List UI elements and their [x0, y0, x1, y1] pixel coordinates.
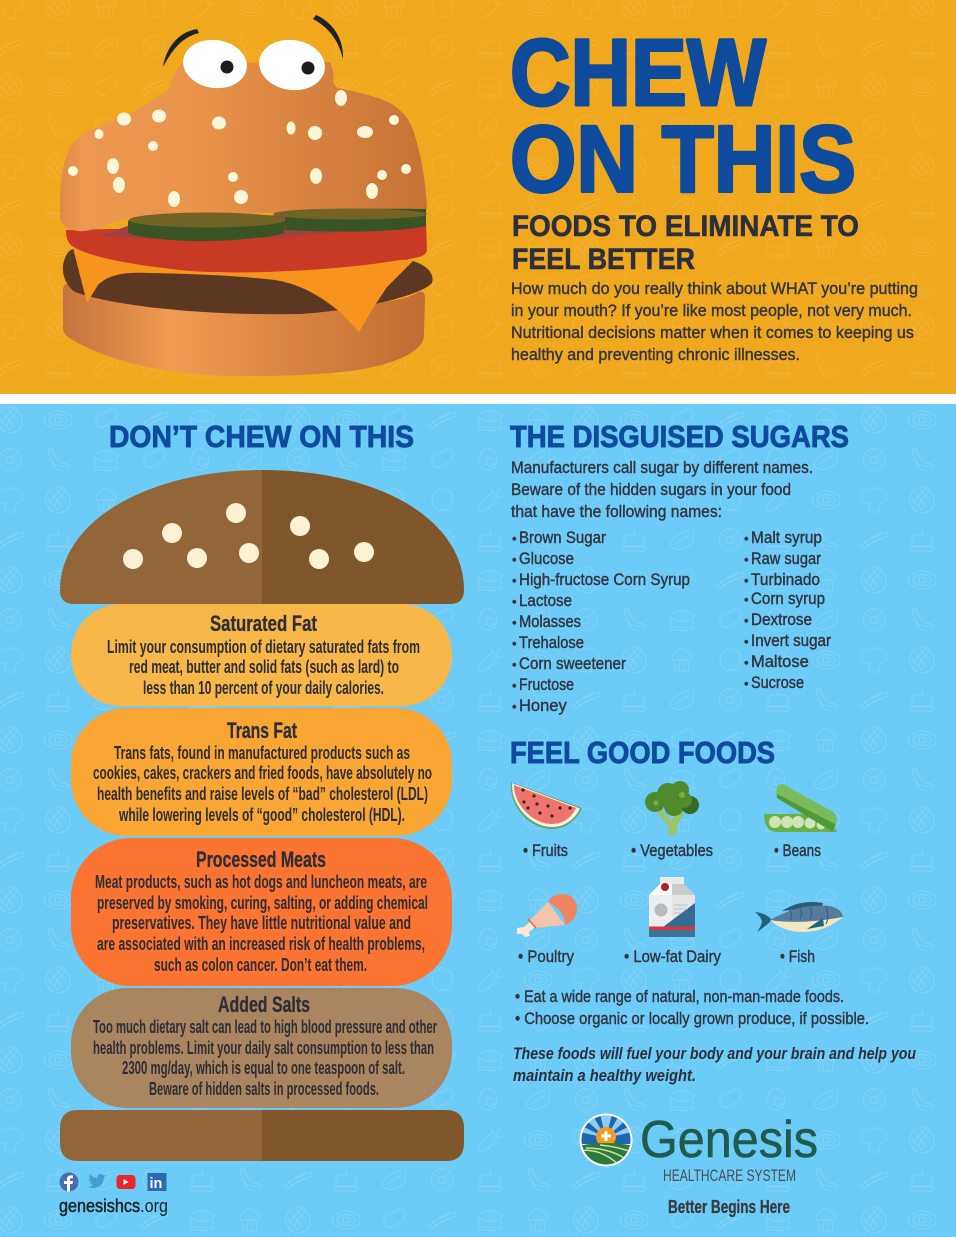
panel: processed meats: Processed Meats	[196, 847, 326, 872]
panel: added salts: Beware of hidden salts in processed foods.	[149, 1079, 379, 1099]
food advice bullets: • Choose organic or locally grown produce, if possible.	[515, 1010, 869, 1028]
icon: poultry leg	[517, 894, 577, 937]
sugar list: left column: Corn sweetener	[519, 655, 626, 673]
label: fish: • Fish	[780, 948, 815, 966]
icon: beans	[764, 784, 837, 832]
sugar list: right column: Turbinado	[751, 571, 820, 589]
sugar list: left column: •	[512, 594, 517, 609]
sugar list: left column: •	[512, 636, 517, 651]
sugars intro: Manufacturers call sugar by different names.	[511, 459, 813, 477]
sugar list: left column: Trehalose	[519, 634, 584, 652]
panel: added salts: Added Salts	[218, 992, 310, 1017]
sugar list: right column: •	[744, 655, 749, 670]
panel: added salts: 2300 mg/day, which is equal to one teaspoon of salt.	[122, 1058, 405, 1078]
intro paragraph: Nutritional decisions matter when it comes to keeping us	[511, 324, 914, 342]
logo: genesis healthcare system: HEALTHCARE SYSTEM	[663, 1166, 796, 1185]
sugar list: right column: Corn syrup	[751, 590, 825, 608]
label: fruits: • Fruits	[523, 842, 568, 860]
sugar list: right column: Dextrose	[751, 611, 812, 629]
subtitle: FEEL BETTER	[512, 243, 695, 276]
tagline: Better Begins Here	[668, 1197, 790, 1217]
panel: trans fat	[71, 708, 452, 836]
website: genesishcs.org	[59, 1196, 168, 1216]
icon: watermelon	[511, 782, 582, 829]
label: beans: • Beans	[774, 842, 821, 860]
sugar list: right column	[744, 529, 831, 692]
subtitle: FOODS TO ELIMINATE TO	[512, 210, 859, 243]
panel: saturated fat: less than 10 percent of your daily calories.	[143, 678, 384, 698]
orange header background	[0, 0, 956, 394]
sugar list: left column: •	[512, 552, 517, 567]
sugar list: left column: Molasses	[519, 613, 581, 631]
sugar list: right column: •	[744, 592, 749, 607]
sugar list: right column: •	[744, 676, 749, 691]
panel: saturated fat	[71, 604, 452, 706]
sugars intro: that have the following names:	[511, 503, 722, 521]
sugar list: left column: •	[512, 657, 517, 672]
heading: don't chew on this: DON’T CHEW ON THIS	[109, 419, 414, 454]
panel: saturated fat: red meat, butter and solid fats (such as lard) to	[129, 657, 399, 677]
sugar list: right column: Raw sugar	[751, 550, 821, 568]
top bun	[60, 470, 464, 604]
italic callout	[513, 1045, 916, 1085]
sugar list: right column: Malt syrup	[751, 529, 822, 547]
panel: processed meats: preserved by smoking, curing, salting, or adding chemical	[97, 893, 428, 913]
panel: processed meats: are associated with an increased risk of health problems,	[97, 934, 425, 954]
sugar list: left column: Fructose	[519, 676, 574, 694]
heading: the disguised sugars: THE DISGUISED SUGARS	[510, 419, 849, 454]
panel: processed meats: preservatives. They have little nutritional value and	[112, 913, 411, 933]
sugars intro: Beware of the hidden sugars in your food	[511, 481, 791, 499]
sugar list: left column: High-fructose Corn Syrup	[519, 571, 690, 589]
sugar list: left column: •	[512, 699, 517, 714]
logo: genesis healthcare system: Genesis	[640, 1111, 818, 1169]
social icons	[60, 1172, 166, 1192]
social icons: in	[150, 1176, 162, 1192]
panel: added salts	[71, 988, 452, 1108]
panel: trans fat: while lowering levels of “good” cholesterol (HDL).	[118, 805, 405, 825]
panel: trans fat: Trans fats, found in manufactured products such as	[114, 743, 410, 763]
title: CHEW	[510, 20, 766, 126]
italic callout: maintain a healthy weight.	[513, 1067, 696, 1085]
sugar list: left column: Honey	[519, 697, 567, 715]
sugar list: right column: •	[744, 573, 749, 588]
sugar list: right column: Sucrose	[751, 674, 804, 692]
panel: added salts: health problems. Limit your daily salt consumption to less than	[93, 1038, 434, 1058]
panel: processed meats: such as colon cancer. Don’t eat them.	[154, 955, 367, 975]
title: ON THIS	[510, 106, 856, 212]
sugar list: right column: •	[744, 613, 749, 628]
sugar list: right column: Maltose	[751, 653, 809, 671]
sugar list: left column: •	[512, 678, 517, 693]
label: low-fat dairy: • Low-fat Dairy	[624, 948, 722, 966]
bottom bun	[60, 1110, 464, 1161]
panel: added salts: Too much dietary salt can lead to high blood pressure and other	[93, 1017, 437, 1037]
logo: genesis healthcare system	[578, 1111, 818, 1185]
illustration: cartoon burger	[60, 15, 433, 376]
sugar list: left column: Glucose	[519, 550, 574, 568]
sugar list: left column: •	[512, 573, 517, 588]
panel: processed meats	[71, 838, 452, 986]
icon: fish	[755, 902, 843, 932]
label: poultry: • Poultry	[518, 948, 575, 966]
heading: feel good foods: FEEL GOOD FOODS	[510, 735, 775, 770]
panel: trans fat: Trans Fat	[227, 718, 297, 743]
sugar list: right column: •	[744, 634, 749, 649]
panel: saturated fat: Saturated Fat	[210, 611, 318, 636]
label: vegetables: • Vegetables	[631, 842, 713, 860]
food advice bullets: • Eat a wide range of natural, non-man-made foods.	[515, 988, 844, 1006]
subtitle	[512, 210, 859, 276]
sugar list: left column: •	[512, 531, 517, 546]
sugar list: left column	[512, 529, 690, 715]
intro paragraph: healthy and preventing chronic illnesses.	[511, 346, 800, 364]
panel: processed meats: Meat products, such as hot dogs and luncheon meats, are	[95, 872, 427, 892]
icon: milk carton	[649, 877, 695, 937]
blue body background	[0, 404, 956, 1237]
title	[510, 20, 856, 212]
intro paragraph: in your mouth? If you’re like most people, not very much.	[511, 302, 912, 320]
sugar list: left column: Brown Sugar	[519, 529, 606, 547]
sugar list: right column: Invert sugar	[751, 632, 831, 650]
sugars intro	[511, 459, 813, 521]
panel: saturated fat: Limit your consumption of dietary saturated fats from	[107, 637, 420, 657]
panel: trans fat: health benefits and raise levels of “bad” cholesterol (LDL)	[97, 784, 428, 804]
intro paragraph	[511, 280, 918, 364]
sugar list: right column: •	[744, 531, 749, 546]
food advice bullets	[515, 988, 869, 1028]
sugar list: left column: Lactose	[519, 592, 572, 610]
panel: trans fat: cookies, cakes, crackers and fried foods, have absolutely no	[93, 763, 432, 783]
sugar list: right column: •	[744, 552, 749, 567]
intro paragraph: How much do you really think about WHAT you’re putting	[511, 280, 918, 298]
icon: broccoli	[645, 781, 699, 835]
sugar list: left column: •	[512, 615, 517, 630]
